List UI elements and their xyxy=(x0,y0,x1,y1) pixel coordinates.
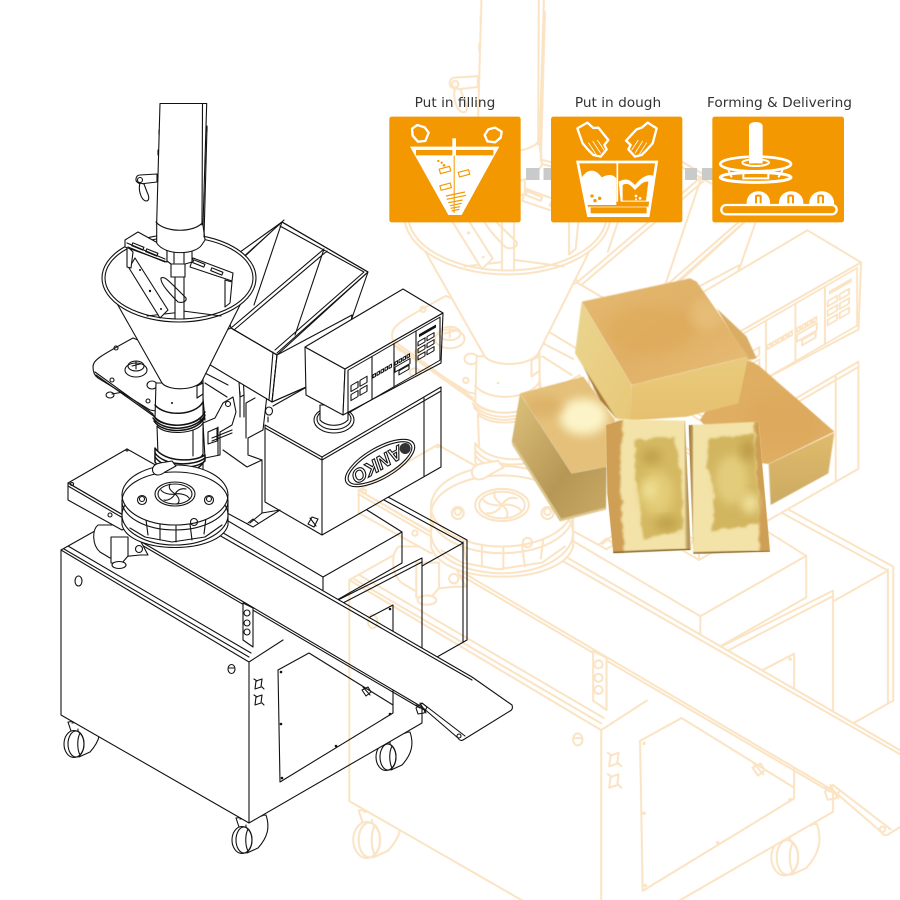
machine line drawing (foreground) xyxy=(61,104,512,854)
connector dashes: filling to dough xyxy=(526,168,552,180)
photo: pineapple cakes xyxy=(512,278,834,555)
machine watermark (background, peach) xyxy=(348,0,900,900)
back sliver and top cake xyxy=(575,278,757,421)
ANKO logo on machine body: ANKO xyxy=(347,440,407,487)
label: put in dough: Put in dough xyxy=(575,95,661,111)
cut cake: right half xyxy=(687,421,772,554)
cut cake: left half xyxy=(603,419,691,555)
panel: dough icon xyxy=(551,117,682,222)
icon: dough hopper xyxy=(578,162,657,216)
left cake xyxy=(512,377,615,521)
panel: filling icon xyxy=(389,117,521,222)
ANKO logo on machine body xyxy=(338,430,422,496)
icon: conveyor with dough balls xyxy=(721,191,837,214)
process flow xyxy=(389,95,852,222)
connector dashes: dough to forming xyxy=(685,168,713,180)
icon: funnel with stirrer xyxy=(410,138,499,215)
panel: forming icon xyxy=(712,117,844,222)
icon: filling blobs xyxy=(412,125,502,142)
icon: dough hands xyxy=(577,123,657,157)
icon: encrusting shutter xyxy=(720,122,791,182)
right cake xyxy=(700,360,834,505)
label: forming and delivering: Forming & Delivering xyxy=(707,95,852,111)
label: put in filling: Put in filling xyxy=(415,95,495,111)
